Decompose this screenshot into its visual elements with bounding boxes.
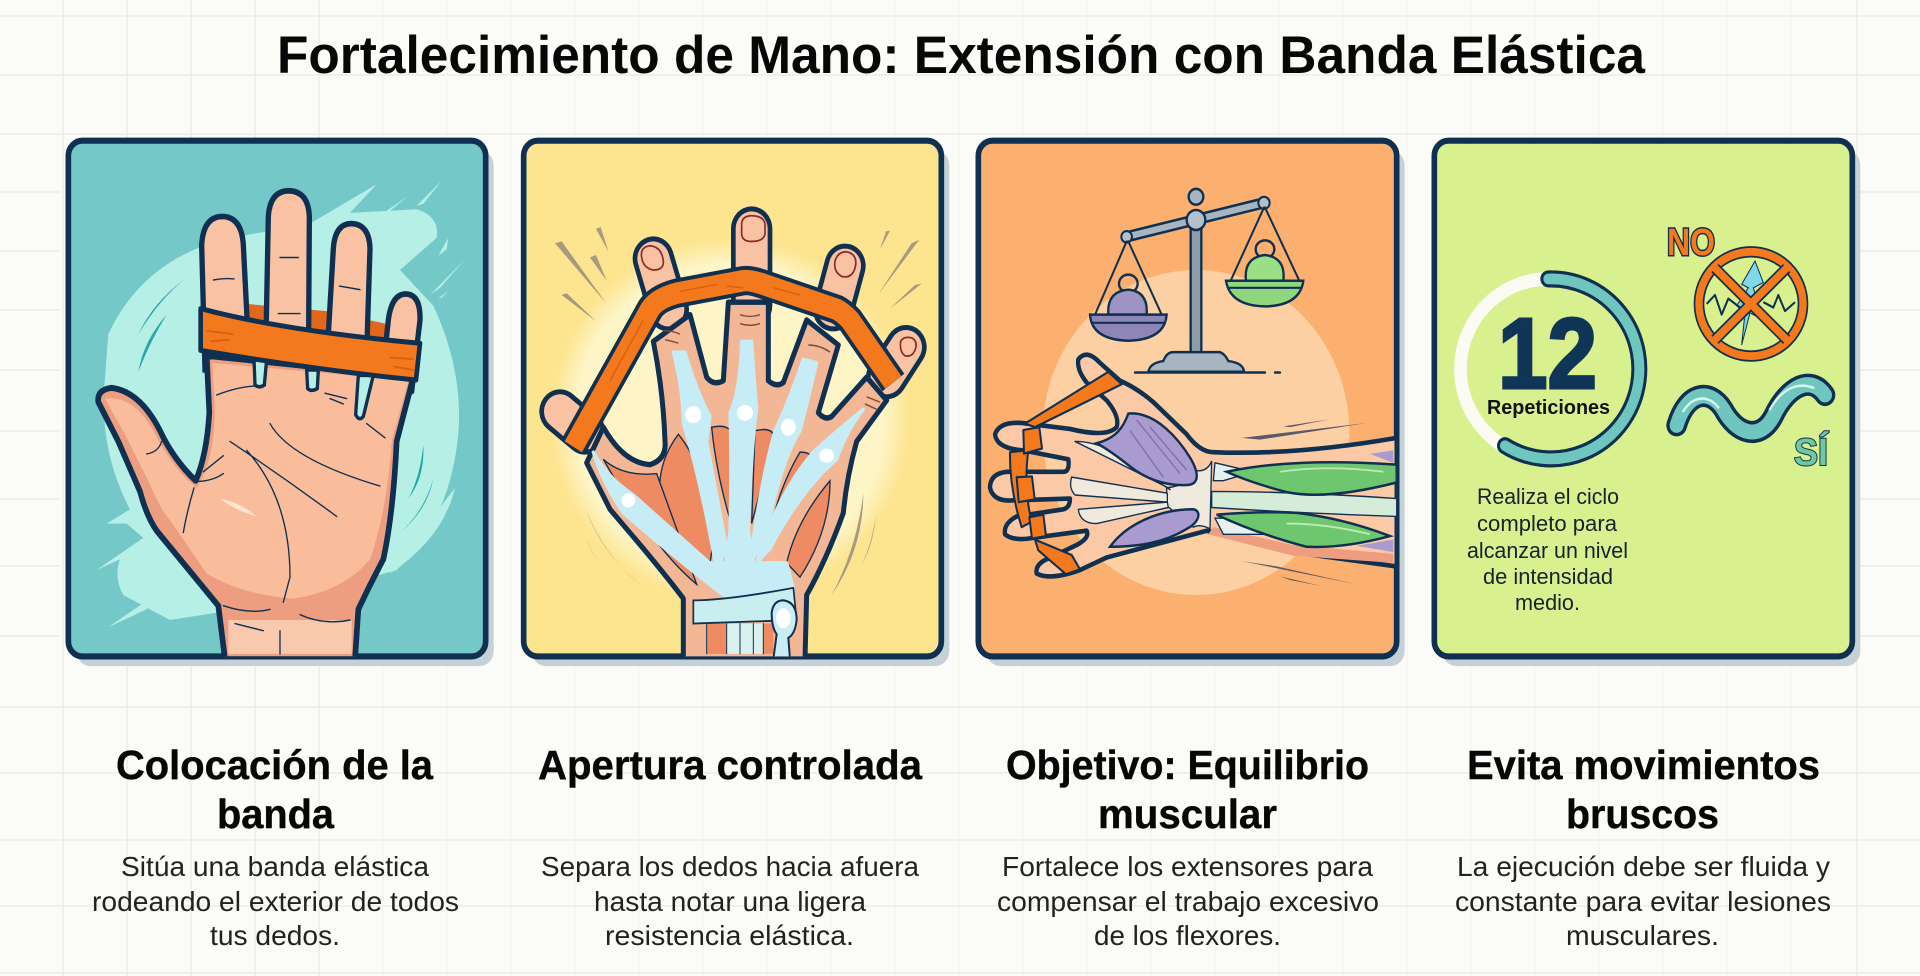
- heading: objetivo: [1006, 742, 1369, 837]
- body: objetivo: Fortalece los extensores para: [1002, 851, 1373, 882]
- icon: prohibited jerky lightning: [1699, 252, 1803, 356]
- body: objetivo: de los flexores.: [1094, 920, 1281, 951]
- label: SÍ: SÍ: [1794, 430, 1829, 474]
- number 12: 12: [1498, 298, 1597, 410]
- body: objetivo: [997, 851, 1379, 951]
- body: evita: musculares.: [1566, 920, 1719, 951]
- icon: orange elastic band: [201, 309, 420, 380]
- motion lines: [555, 227, 922, 595]
- panel: controlled opening with tendons: [524, 141, 949, 666]
- body: apertura: hasta notar una ligera: [594, 886, 866, 917]
- body: colocación: [92, 851, 459, 951]
- weight: purple: [1090, 275, 1167, 341]
- icon: hand anatomy: [560, 216, 916, 659]
- note text: alcanzar un nivel: [1467, 538, 1628, 563]
- heading: evita: [1467, 742, 1820, 837]
- heading: apertura: Apertura controlada: [538, 742, 923, 788]
- label: NO: NO: [1667, 222, 1715, 264]
- body: apertura: Separa los dedos hacia afuera: [541, 851, 919, 882]
- note text: de intensidad: [1483, 564, 1613, 589]
- body: colocación: Sitúa una banda elástica: [121, 851, 429, 882]
- panel: hand with band placed: [68, 141, 494, 666]
- panel background: [1434, 141, 1860, 666]
- heading: colocación: Colocación de la: [116, 742, 434, 788]
- panel: muscular balance: [978, 141, 1405, 666]
- icon: band over fingers: [1010, 372, 1122, 574]
- body: apertura: [541, 851, 919, 951]
- heading: colocación: banda: [217, 791, 335, 837]
- body: evita: La ejecución debe ser fluida y: [1457, 851, 1830, 882]
- caption: colocación: [92, 742, 459, 951]
- heading: evita: bruscos: [1566, 791, 1719, 837]
- icon: stretched orange band: [573, 281, 893, 447]
- icon: smooth wave: [1677, 385, 1825, 432]
- heading: colocación: [116, 742, 434, 837]
- title: Fortalecimiento de Mano: Extensión con Banda Elástica: [277, 26, 1646, 85]
- body: evita: constante para evitar lesiones: [1455, 886, 1831, 917]
- body: colocación: tus dedos.: [210, 920, 340, 951]
- note text: Realiza el ciclo: [1477, 484, 1619, 509]
- body: evita: [1455, 851, 1831, 951]
- caption: evita: [1455, 742, 1831, 951]
- weight: green: [1226, 240, 1303, 306]
- glowing halo: [550, 238, 910, 602]
- note text: medio.: [1515, 590, 1580, 615]
- caption: objetivo: [997, 742, 1379, 951]
- body: objetivo: compensar el trabajo excesivo: [997, 886, 1379, 917]
- heading: evita: Evita movimientos: [1467, 742, 1820, 788]
- note text: [1467, 484, 1628, 615]
- background swoosh: [97, 181, 465, 627]
- glowing circle: [1043, 270, 1349, 595]
- label: Repeticiones: Repeticiones: [1487, 397, 1610, 419]
- body: apertura: resistencia elástica.: [605, 920, 854, 951]
- caption: apertura: [538, 742, 923, 951]
- icon: balance scale: [1090, 189, 1303, 372]
- progress ring: [1460, 279, 1639, 459]
- body: colocación: rodeando el exterior de todos: [92, 886, 459, 917]
- heading: objetivo: muscular: [1098, 791, 1277, 837]
- heading: objetivo: Objetivo: Equilibrio: [1006, 742, 1369, 788]
- motion lines: [1242, 419, 1367, 586]
- panel: repetitions and no jerky movements: [1434, 141, 1860, 666]
- note text: completo para: [1477, 511, 1618, 536]
- icon: forearm anatomy: [990, 355, 1397, 576]
- icon: open hand palm: [98, 191, 420, 659]
- gaps between the fingers: [254, 359, 267, 387]
